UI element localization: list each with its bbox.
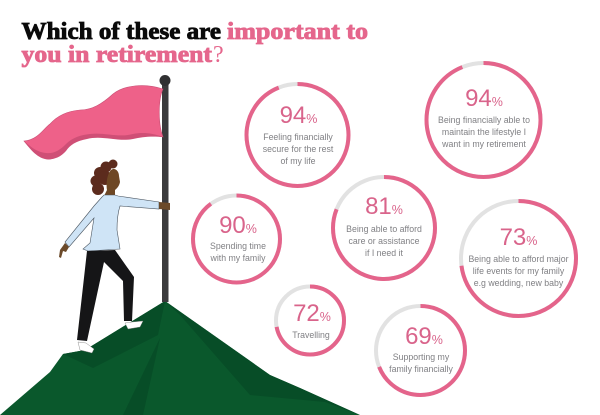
flag pole [160,75,170,302]
back hand [59,243,69,258]
stat: 94% financially secure [246,84,348,186]
stat: 73% major life events: e.g wedding, new baby [474,278,564,288]
stat: 94% financially secure: 94% [280,102,317,129]
shoes [78,321,143,353]
stat: 94% maintain lifestyle: Being financially able to [438,115,530,125]
stat: 94% financially secure: of my life [280,156,316,166]
stat: 94% maintain lifestyle: 94% [465,85,503,112]
stat: 90% time with family: Spending time [210,241,266,251]
shirt [65,195,159,251]
stat: 69% supporting family: 69% [405,323,443,350]
stat: 81% care or assistance: 81% [365,193,403,220]
stat: 69% supporting family: family financially [389,364,453,374]
title [22,19,368,68]
stat: 69% supporting family [376,306,465,395]
stat: 90% time with family: 90% [219,212,257,239]
stat: 81% care or assistance: care or assistance [348,236,420,246]
trousers [77,250,134,341]
hair [90,160,118,195]
face and neck [104,169,120,196]
flag [24,86,163,159]
hand on pole [159,202,170,210]
illustration: climber planting flag on mountain [0,75,360,415]
stat: 90% time with family [193,196,280,282]
stat: 72% travelling: Travelling [292,330,330,340]
stat: 90% time with family: with my family [210,253,266,263]
stat: 81% care or assistance: Being able to afford [346,224,422,234]
stat: 72% travelling: 72% [293,300,331,327]
stat: 94% financially secure: secure for the rest [263,144,334,154]
stat: 94% maintain lifestyle [426,63,540,177]
stat: 81% care or assistance [333,177,435,279]
title: important to [227,19,368,45]
stat: 73% major life events [461,201,576,316]
person [59,160,170,353]
title: ? [213,42,224,68]
stat: 73% major life events: 73% [500,224,537,251]
stat: 94% maintain lifestyle: want in my retirement [441,139,526,149]
title: Which of these are [22,19,221,45]
stat: 94% financially secure: Feeling financially [263,132,333,142]
title: you in retirement [22,42,212,68]
stat: 81% care or assistance: if I need it [365,248,404,258]
stat: 73% major life events: Being able to afford major [468,254,569,264]
mountain [0,301,360,415]
stat: 69% supporting family: Supporting my [393,352,450,362]
stat: 94% maintain lifestyle: maintain the lifestyle I [442,127,526,137]
stat: 72% travelling [276,286,344,354]
stat: 73% major life events: life events for my family [473,266,565,276]
